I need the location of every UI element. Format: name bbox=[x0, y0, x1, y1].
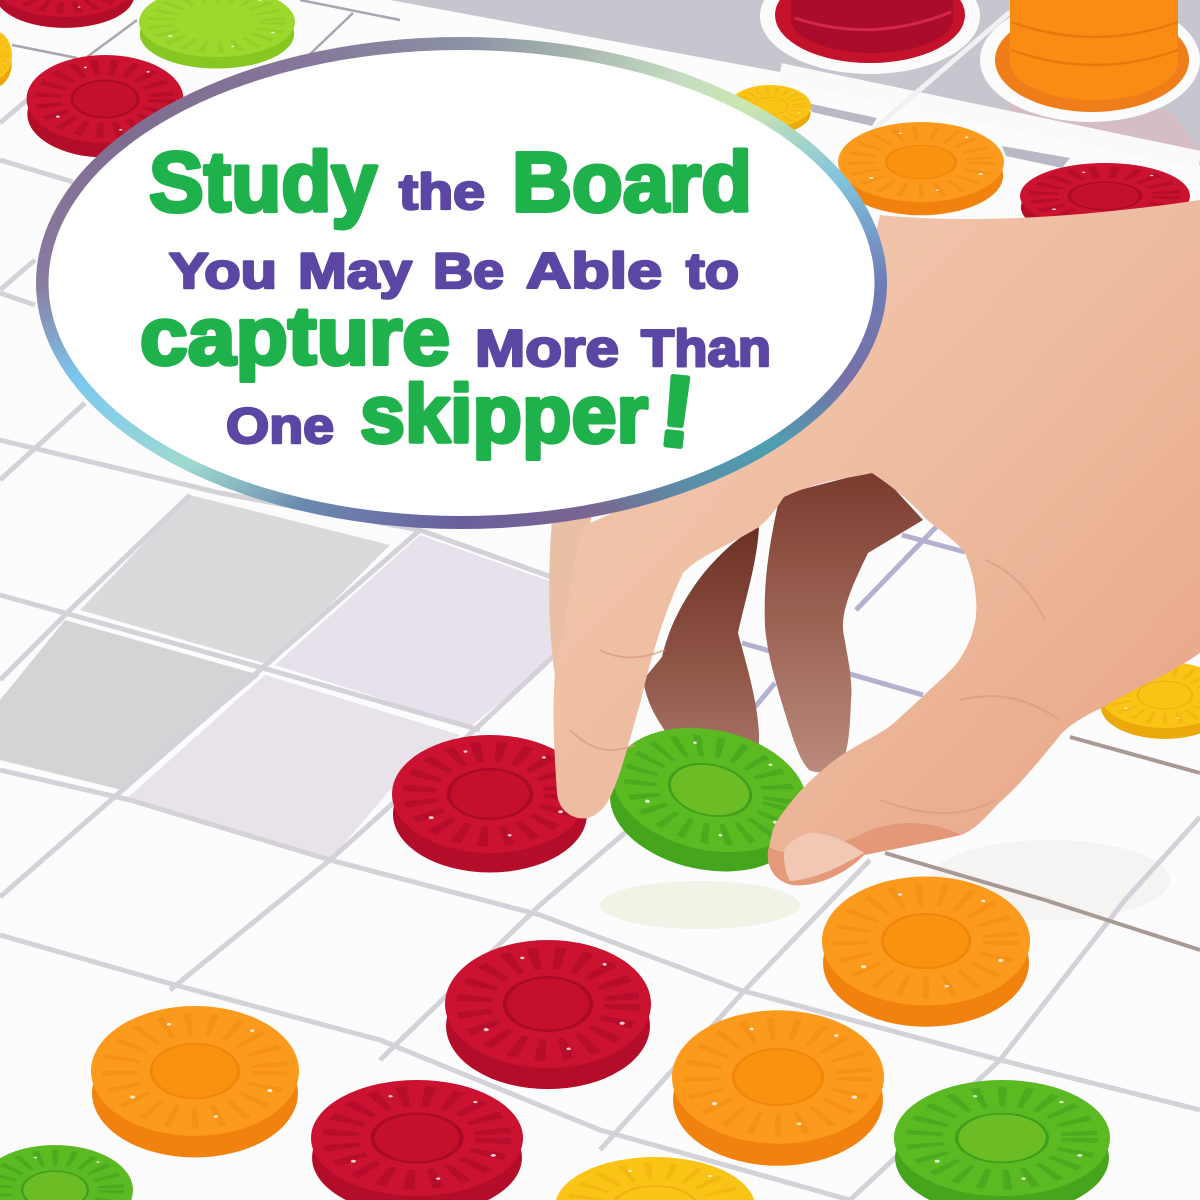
chip: bottom left green bbox=[0, 1145, 133, 1200]
chip: upper right red bbox=[1020, 163, 1190, 240]
text line 4: One bbox=[226, 398, 334, 454]
chip: upper orange bbox=[838, 122, 1004, 215]
chip: bottom yellow bbox=[555, 1157, 755, 1200]
heading line 1 bbox=[149, 135, 752, 229]
stack of red chips on circle bbox=[760, 0, 980, 74]
heading line 1: Study bbox=[149, 135, 377, 229]
text line 2: Able bbox=[526, 243, 662, 299]
gradient rim bbox=[36, 37, 887, 529]
text line 4 bbox=[226, 354, 700, 469]
chip: yellow behind bubble bbox=[729, 85, 811, 134]
text line 2: May bbox=[298, 243, 412, 299]
chip: right orange bbox=[822, 876, 1030, 1027]
text line 3: More bbox=[475, 320, 619, 378]
chip: top green bbox=[139, 0, 295, 69]
heading line 1: the bbox=[399, 164, 485, 220]
stack of orange chips on circle bbox=[980, 0, 1200, 122]
hand holding chip bbox=[549, 200, 1200, 885]
text line 4: ! bbox=[654, 354, 700, 469]
text line 4: skipper bbox=[360, 369, 648, 460]
text line 2 bbox=[169, 243, 739, 299]
thumb shading bbox=[768, 823, 961, 885]
chip: centre red bbox=[445, 940, 651, 1089]
text line 2: to bbox=[686, 243, 739, 299]
text line 2: You bbox=[169, 243, 277, 299]
chip: red near fingers bbox=[392, 735, 588, 872]
chip: bottom red bbox=[311, 1080, 523, 1200]
chip: bottom orange centre bbox=[672, 1010, 884, 1166]
thumbnail bbox=[784, 833, 864, 881]
chip: green chip held in fingers bbox=[598, 711, 818, 888]
chip: bottom orange left bbox=[91, 1006, 299, 1157]
ring finger behind chip bbox=[765, 470, 923, 772]
text line 3: Than bbox=[641, 320, 771, 378]
middle finger behind chip bbox=[643, 525, 759, 760]
chip: top left yellow bbox=[0, 30, 12, 88]
speech bubble bbox=[36, 37, 887, 529]
chip: bottom green bbox=[894, 1080, 1110, 1200]
text line 3 bbox=[140, 291, 771, 382]
chip: top red bbox=[0, 0, 135, 28]
knuckle creases bbox=[570, 560, 1060, 813]
white bubble interior bbox=[48, 50, 874, 516]
text line 2: Be bbox=[433, 243, 504, 299]
heading line 1: Board bbox=[512, 135, 752, 229]
chip: upper left red bbox=[27, 55, 184, 158]
text line 3: capture bbox=[140, 291, 450, 382]
chip: right yellow bbox=[1100, 662, 1200, 739]
